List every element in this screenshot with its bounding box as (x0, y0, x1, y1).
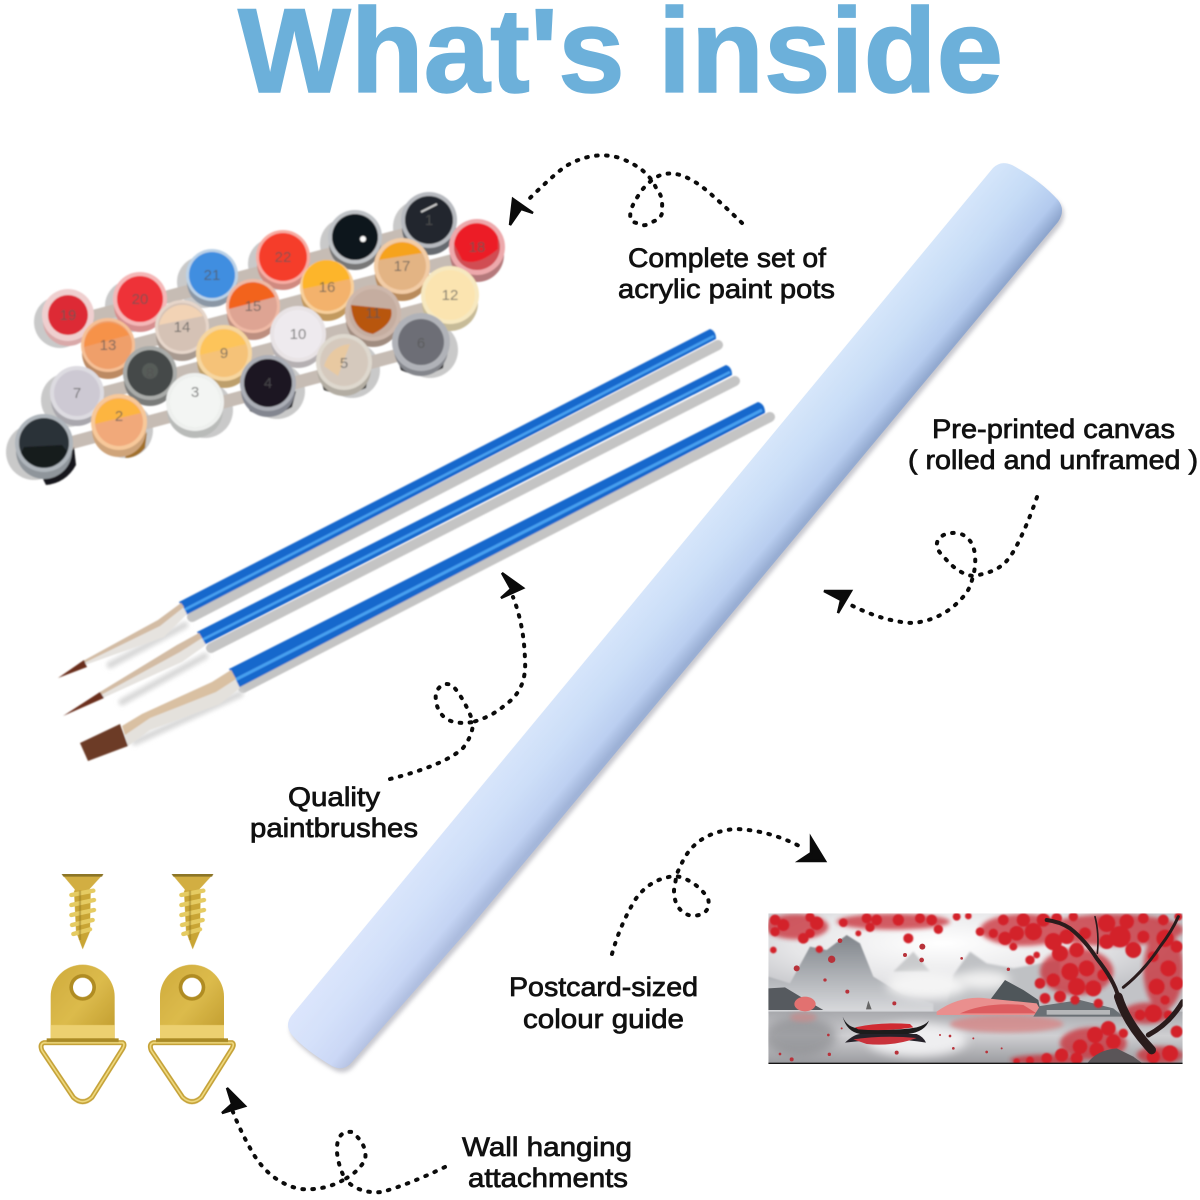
label: colour guide: Postcard-sized (509, 972, 698, 1002)
hanger left (41, 965, 124, 1102)
pot 19: 19 (60, 307, 76, 324)
pot 12: 12 (442, 287, 458, 304)
pot 18 (449, 219, 505, 282)
arrow: to paint pots (510, 155, 742, 225)
pot 14: 14 (174, 319, 190, 336)
pot 14 (155, 300, 209, 361)
pot 1: 1 (425, 212, 433, 229)
label: colour guide: colour guide (523, 1004, 684, 1034)
mountains (768, 935, 1060, 1012)
pot 19 (42, 289, 94, 346)
pot 6 (392, 313, 450, 376)
pot 15: 15 (245, 298, 261, 315)
pot 7: 7 (73, 385, 81, 402)
floating petals (779, 938, 1010, 1061)
paintbrushes (58, 329, 770, 761)
pot 3: 3 (191, 384, 199, 401)
pot 20: 20 (132, 291, 148, 308)
shore rocks (1087, 1048, 1143, 1064)
pot 8 (123, 346, 177, 406)
label: wall hanging (462, 1132, 632, 1193)
label: canvas: ( rolled and unframed ) (908, 445, 1198, 475)
water (768, 1012, 1183, 1065)
pot 2 (91, 394, 147, 458)
pot 11 (345, 285, 401, 347)
pot 17 (374, 238, 430, 301)
pot 11: 11 (365, 305, 381, 322)
pot 21 (186, 249, 238, 307)
sky (768, 913, 1183, 1013)
pot 2: 2 (115, 408, 123, 425)
arrow: to canvas (824, 497, 1037, 623)
pot 16: 16 (319, 279, 335, 296)
label: paintbrushes: paintbrushes (250, 813, 418, 843)
pot 20 (113, 272, 167, 332)
label: paintbrushes: Quality (288, 782, 381, 812)
label: wall hanging: attachments (468, 1163, 628, 1193)
pot 1 lower (15, 414, 76, 485)
pot strip rails (48, 228, 477, 449)
pot 22: 22 (275, 249, 291, 266)
pot 13: 13 (100, 337, 116, 354)
pot 5 (316, 334, 372, 396)
label: paint pots (618, 243, 835, 304)
foliage underlayer (765, 914, 1183, 1065)
pot 10 (270, 306, 326, 368)
red foliage (770, 912, 1183, 1065)
pot 10: 10 (290, 326, 306, 343)
pot 9 (196, 325, 252, 388)
boat (843, 1017, 929, 1045)
pot 15 (226, 279, 280, 340)
tree trunk (1047, 917, 1183, 1050)
brush 2 (63, 365, 732, 716)
pot 8: 8 (146, 365, 154, 382)
far shore (768, 980, 1123, 1017)
brush shadows (192, 345, 770, 688)
brush 3 (80, 402, 765, 761)
paint pots strip (6, 192, 505, 485)
pot 1 (401, 192, 457, 255)
pot 7 (50, 366, 104, 426)
pot 12 (421, 266, 479, 331)
hanger right (150, 965, 233, 1102)
pot shadows (6, 200, 458, 480)
pot 9: 9 (220, 345, 228, 362)
label: canvas: Pre-printed canvas (932, 414, 1175, 444)
arrow: to brushes (390, 573, 525, 779)
hanging attachments (41, 874, 233, 1102)
pot 21: 21 (204, 267, 220, 284)
pot 5: 5 (340, 355, 348, 372)
pot 4 black (328, 210, 382, 270)
label: canvas (908, 414, 1198, 475)
arrow: to colour guide (612, 829, 825, 954)
colour guide painting (763, 912, 1183, 1065)
pot 17: 17 (394, 258, 410, 275)
pot 4 (240, 355, 296, 417)
pot 18: 18 (469, 239, 485, 256)
arrow: to hanging attachments (222, 1088, 445, 1192)
label: colour guide (509, 972, 698, 1034)
pot 4: 4 (264, 375, 272, 392)
screw right (172, 874, 213, 949)
pot 13 (81, 318, 135, 379)
label: paintbrushes (250, 782, 418, 843)
pot 16 (300, 260, 354, 321)
label: paint pots: Complete set of (628, 243, 827, 273)
pot 22 (256, 230, 310, 290)
label: paint pots: acrylic paint pots (618, 274, 835, 304)
canvas roll (288, 163, 1064, 1072)
label: wall hanging: Wall hanging (462, 1132, 632, 1162)
pot 6: 6 (417, 335, 425, 352)
screw left (62, 874, 103, 949)
brush 1 (58, 329, 716, 678)
pot 3 (166, 373, 224, 438)
